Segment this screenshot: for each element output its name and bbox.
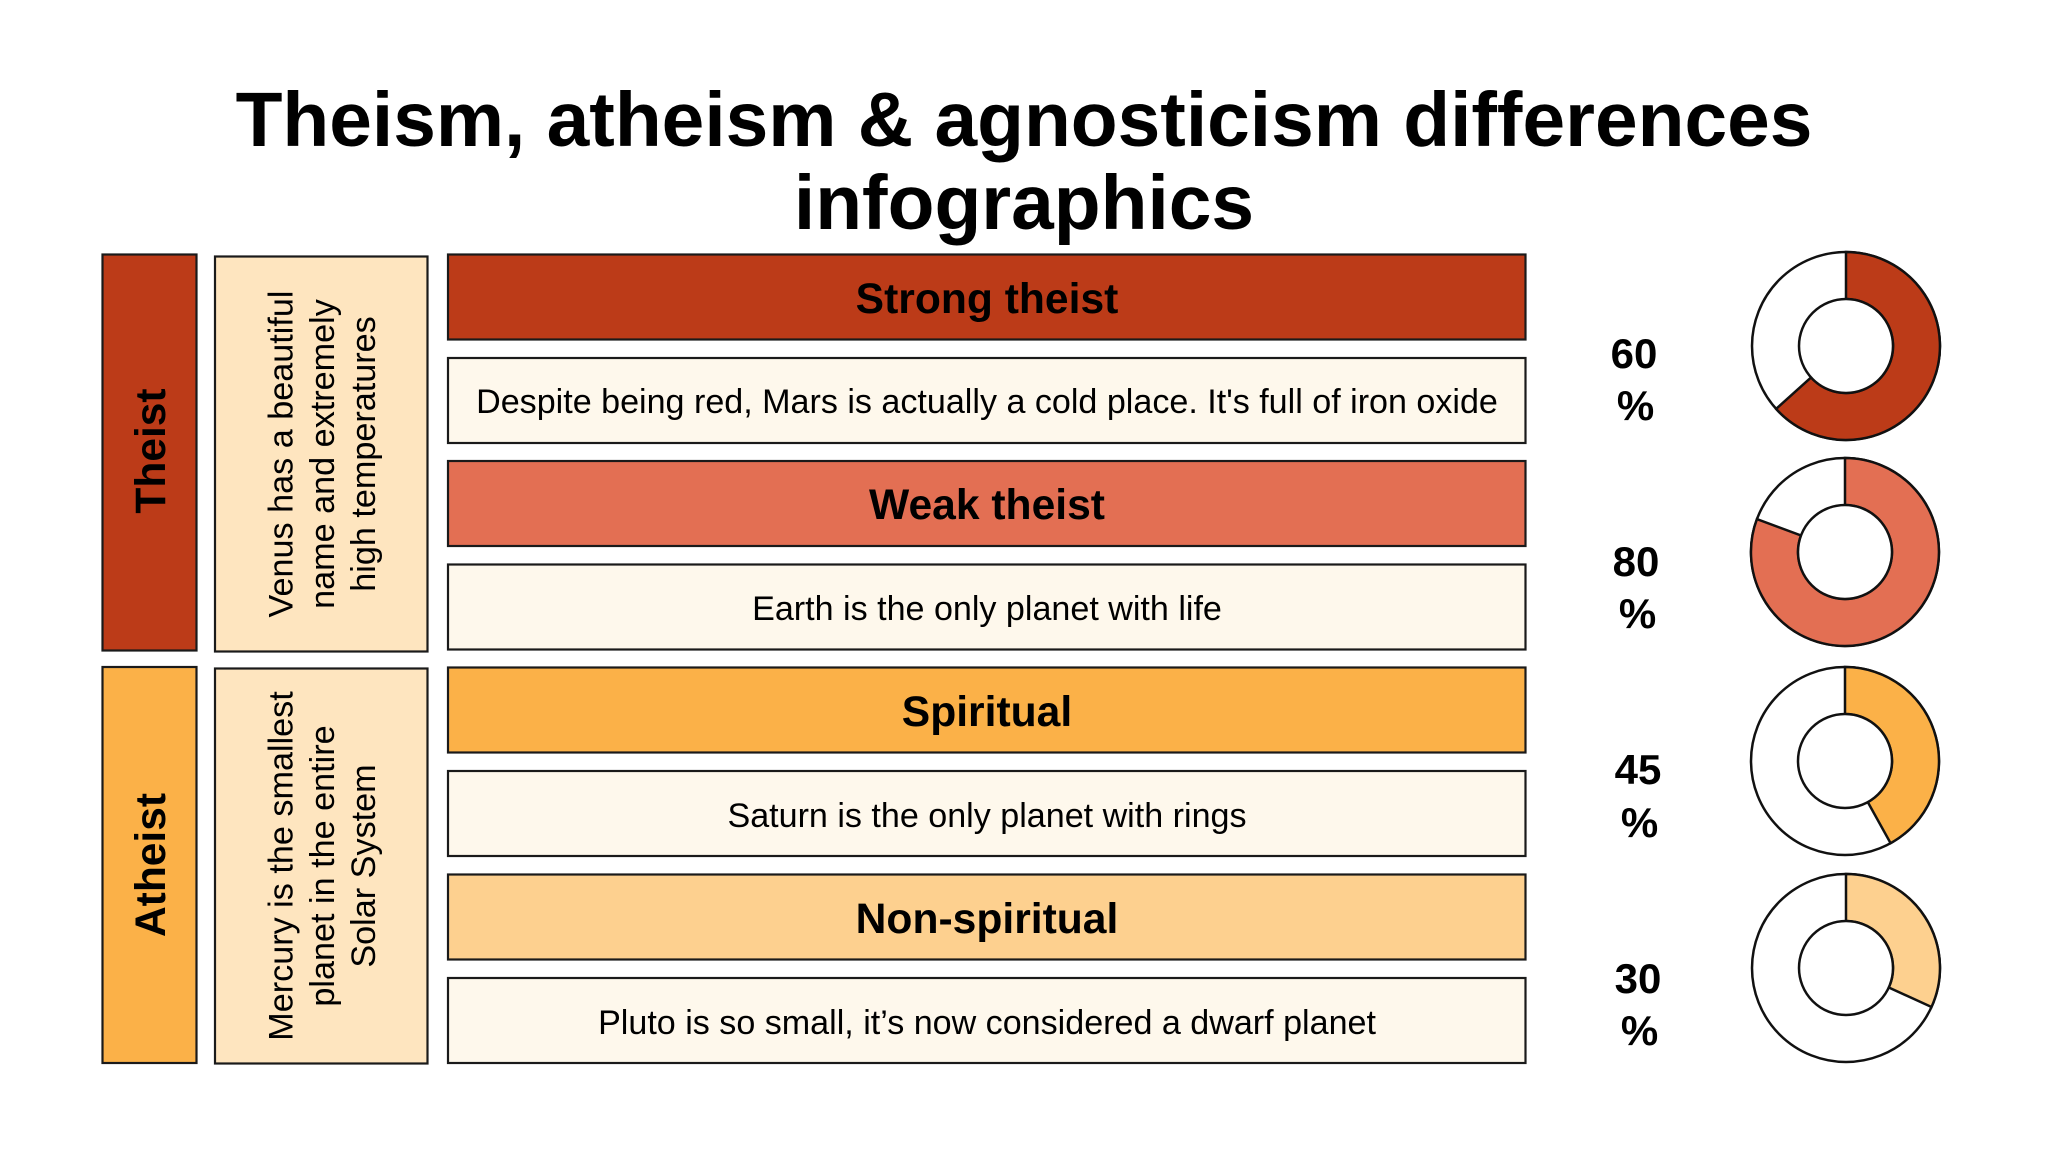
text block: non-spiritual xyxy=(448,978,1526,1063)
percentage: 30%: 30 xyxy=(1615,955,1661,1002)
panel: theist description: Venus has a beautiful xyxy=(262,291,300,617)
text block: weak theist xyxy=(448,564,1526,650)
panel: atheist category label: Atheist xyxy=(128,793,175,937)
panel: atheist description: planet in the entire xyxy=(304,725,342,1007)
donut chart: 45% xyxy=(1751,667,1939,855)
panel: atheist description xyxy=(215,668,428,1064)
text block: weak theist: Earth is the only planet with life xyxy=(752,590,1222,628)
heading: strong theist xyxy=(448,254,1526,340)
text block: spiritual xyxy=(448,771,1526,856)
percentage: 80% xyxy=(1613,538,1659,637)
panel: theist category label xyxy=(102,254,196,650)
title xyxy=(236,78,1812,246)
panel: theist description: high temperatures xyxy=(345,316,383,592)
heading: non-spiritual xyxy=(448,874,1526,960)
percentage: 60%: % xyxy=(1617,382,1654,429)
text block: non-spiritual: Pluto is so small, it’s now considered a dwarf planet xyxy=(598,1004,1376,1042)
heading: strong theist: Strong theist xyxy=(856,275,1118,323)
percentage: 60%: 60 xyxy=(1611,330,1657,377)
panel: atheist category label xyxy=(102,667,196,1063)
heading: spiritual xyxy=(448,668,1526,752)
heading: weak theist xyxy=(448,461,1526,546)
panel: atheist description: Mercury is the smallest xyxy=(262,691,300,1041)
percentage: 80%: 80 xyxy=(1613,538,1659,585)
percentage: 60% xyxy=(1611,330,1657,429)
panel: theist category label: Theist xyxy=(128,388,175,514)
text block: strong theist xyxy=(448,358,1526,443)
donut chart: 60% xyxy=(1752,252,1940,440)
panel: atheist description: Solar System xyxy=(345,764,383,968)
heading: spiritual: Spiritual xyxy=(902,688,1072,736)
heading: non-spiritual: Non-spiritual xyxy=(856,895,1118,943)
percentage: 80%: % xyxy=(1619,590,1656,637)
donut chart: 30% xyxy=(1752,874,1940,1062)
heading: weak theist: Weak theist xyxy=(869,481,1105,529)
percentage: 45%: 45 xyxy=(1615,746,1661,793)
text block: strong theist: Despite being red, Mars is actually a cold place. It's full of iron oxide xyxy=(476,383,1498,421)
title: infographics xyxy=(794,161,1254,246)
title: Theism, atheism & agnosticism differences xyxy=(236,78,1812,163)
percentage: 30%: % xyxy=(1621,1007,1658,1054)
panel: theist description: name and extremely xyxy=(304,298,342,609)
donut chart: 80% xyxy=(1751,458,1939,646)
text block: spiritual: Saturn is the only planet with rings xyxy=(727,797,1247,835)
percentage: 45% xyxy=(1615,746,1661,846)
percentage: 30% xyxy=(1615,955,1661,1054)
panel: theist description xyxy=(215,256,428,652)
percentage: 45%: % xyxy=(1621,799,1658,846)
